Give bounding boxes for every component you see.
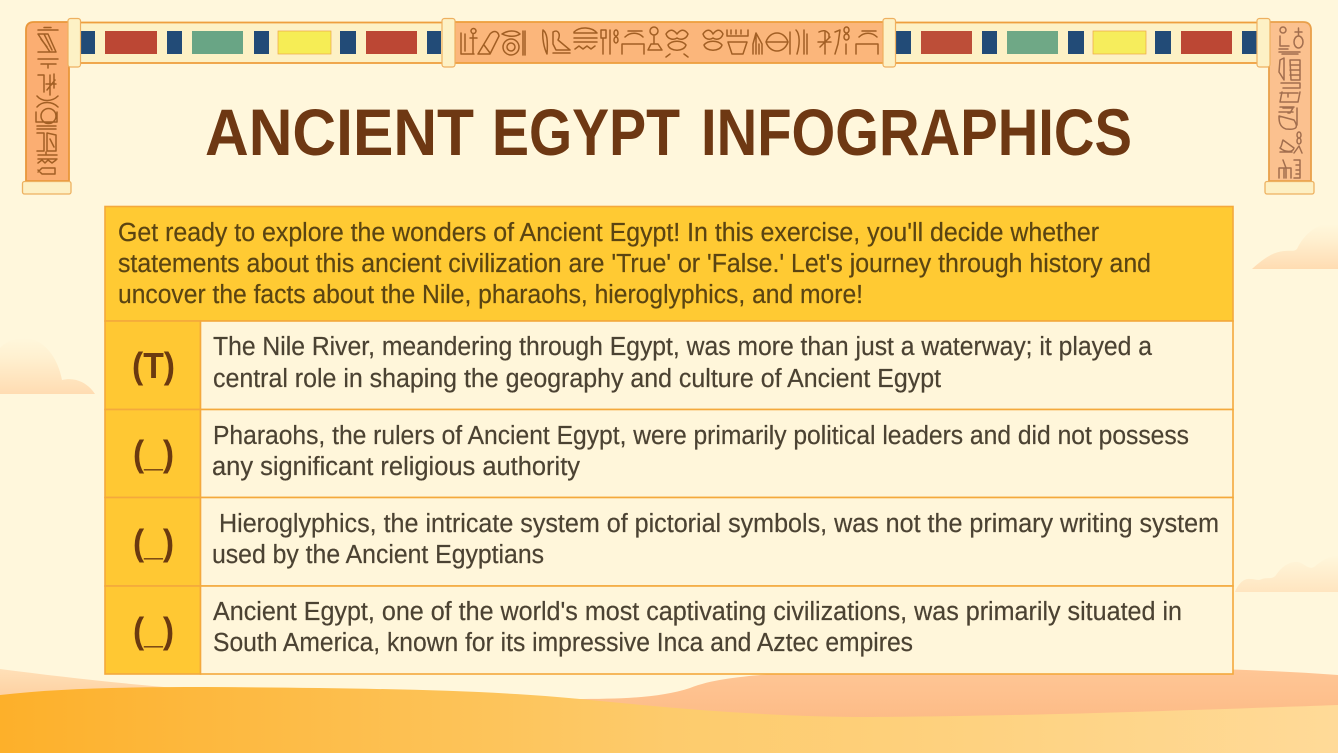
- left column base: [22, 182, 71, 194]
- central hieroglyph band: [454, 22, 884, 63]
- table header panel: [105, 206, 1233, 321]
- title: ANCIENT: [205, 95, 474, 169]
- title: INFOGRAPHICS: [701, 95, 1132, 169]
- dune: back right: [575, 666, 1338, 730]
- intro text: uncover the facts about the Nile, pharaohs, hieroglyphics, and more!: [118, 281, 863, 309]
- answer mark: blank 2: (_): [133, 433, 174, 474]
- answer mark: blank 4: (_): [133, 610, 174, 651]
- statement 2: any significant religious authority: [212, 453, 580, 481]
- row 3 panel: [105, 498, 1233, 586]
- hieroglyphs: right column: [1279, 27, 1303, 178]
- right column base: [1265, 182, 1314, 194]
- cloud: top right: [1252, 224, 1338, 269]
- dune: front: [0, 687, 1338, 753]
- decorative band: left: [79, 22, 443, 63]
- row 4 panel: [105, 586, 1233, 674]
- row 2 panel: [105, 410, 1233, 498]
- cloud: bottom right: [1235, 555, 1338, 592]
- statement 4: Ancient Egypt, one of the world's most captivating civilizations, was primarily situated in: [213, 598, 1182, 626]
- dune: back left: [0, 669, 230, 720]
- hieroglyphs: left column: [36, 28, 58, 174]
- answer mark: T: (T): [132, 345, 175, 386]
- statement 4: South America, known for its impressive Inca and Aztec empires: [213, 629, 913, 657]
- band caps: [68, 18, 1270, 67]
- statement 2: Pharaohs, the rulers of Ancient Egypt, were primarily political leaders and did not possess: [213, 422, 1189, 450]
- decorative band: right: [895, 22, 1258, 63]
- intro text: statements about this ancient civilization are 'True' or 'False.' Let's journey through history and: [118, 250, 1151, 278]
- statement 3: Hieroglyphics, the intricate system of pictorial symbols, was not the primary writing system: [219, 510, 1219, 538]
- answer mark: blank 3: (_): [133, 522, 174, 563]
- title: EGYPT: [492, 95, 680, 169]
- hieroglyphs: central band: [461, 27, 878, 57]
- statement 1: central role in shaping the geography and culture of Ancient Egypt: [213, 365, 941, 393]
- statement 1: The Nile River, meandering through Egypt, was more than just a waterway; it played a: [213, 333, 1153, 361]
- row 1 panel: [105, 321, 1233, 410]
- statement 3: used by the Ancient Egyptians: [212, 541, 544, 569]
- left column with hieroglyphs: [26, 22, 69, 181]
- table: [105, 206, 1233, 674]
- cloud: left: [0, 338, 95, 394]
- right column with hieroglyphs: [1269, 22, 1311, 181]
- intro text: Get ready to explore the wonders of Ancient Egypt! In this exercise, you'll decide whether: [118, 219, 1099, 247]
